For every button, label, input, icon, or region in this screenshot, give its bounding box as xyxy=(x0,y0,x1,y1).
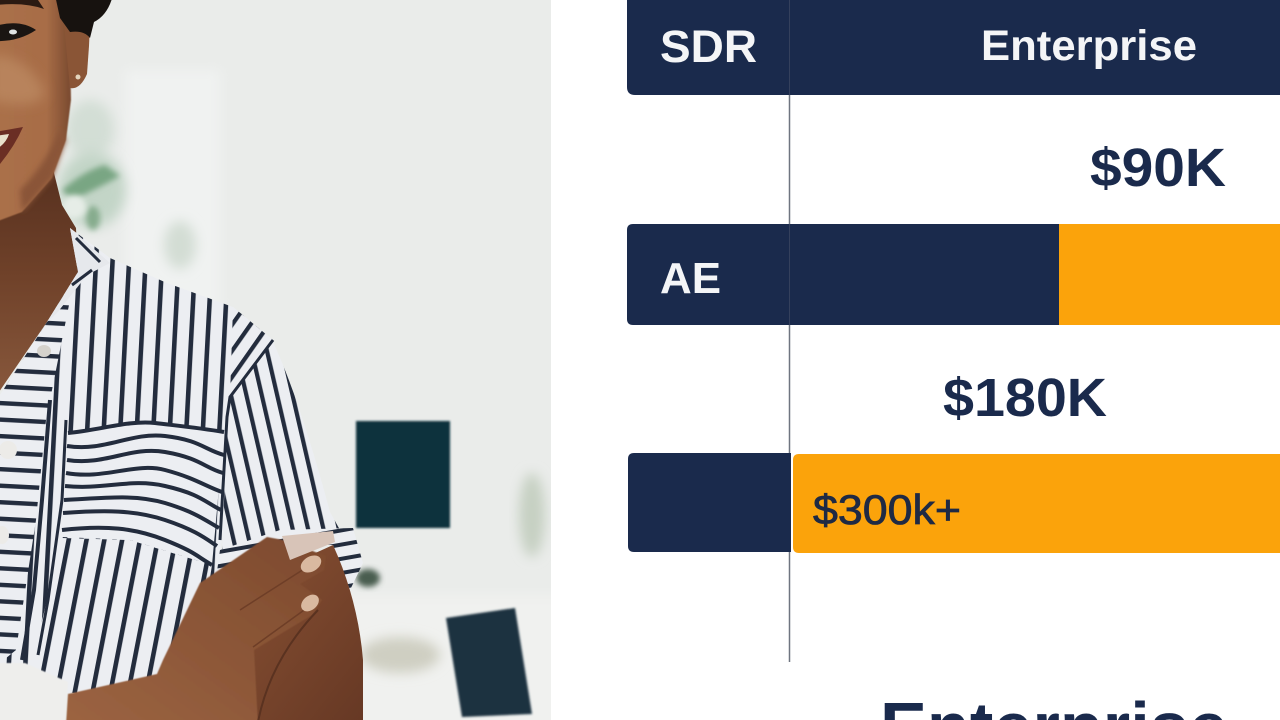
eye xyxy=(0,23,36,41)
arms and hand xyxy=(66,531,363,720)
woman's face and neck xyxy=(0,0,113,405)
white content panel xyxy=(551,0,1280,720)
thumb and cuff fold xyxy=(282,531,335,560)
blurred dark chair or box xyxy=(446,608,532,717)
buttons xyxy=(0,345,51,544)
eyebrow xyxy=(0,0,44,9)
forearm and hand xyxy=(66,537,326,720)
lower front panel xyxy=(30,538,212,693)
hair xyxy=(55,0,113,38)
collar xyxy=(47,228,99,322)
sleeve xyxy=(222,342,340,552)
value: $180K: $180K xyxy=(943,368,1107,428)
ear xyxy=(66,26,90,88)
blurred monitor xyxy=(356,421,450,528)
pocket xyxy=(62,422,224,565)
label: AE: AE xyxy=(660,254,721,303)
sleeve cuff xyxy=(217,528,362,588)
shoulder yoke xyxy=(230,312,273,387)
vertical axis line xyxy=(788,95,790,662)
white undershirt hem xyxy=(6,662,62,690)
striped shirt xyxy=(0,228,363,693)
label: SDR: SDR xyxy=(660,21,757,72)
face xyxy=(0,0,71,224)
row: Enterprise bar xyxy=(628,453,1280,553)
sleeve seam xyxy=(220,340,273,540)
shirt body xyxy=(0,228,273,693)
label: Enterprise column: Enterprise xyxy=(981,22,1197,70)
row: AE bar xyxy=(627,224,1280,325)
neck xyxy=(0,165,78,405)
value: $300k+: $300k+ xyxy=(813,486,961,533)
fingernails xyxy=(300,556,322,612)
placket xyxy=(0,290,72,663)
placket edge xyxy=(22,400,50,660)
value: $90K: $90K xyxy=(1090,138,1226,198)
photo panel: woman in striped shirt in an office xyxy=(0,0,570,720)
earring xyxy=(76,74,80,80)
upper arm xyxy=(253,545,363,720)
row: SDR header bar xyxy=(627,0,1280,95)
blurred office background xyxy=(56,98,550,676)
smile xyxy=(0,127,23,164)
chart: salary ladder by role xyxy=(627,0,1280,720)
